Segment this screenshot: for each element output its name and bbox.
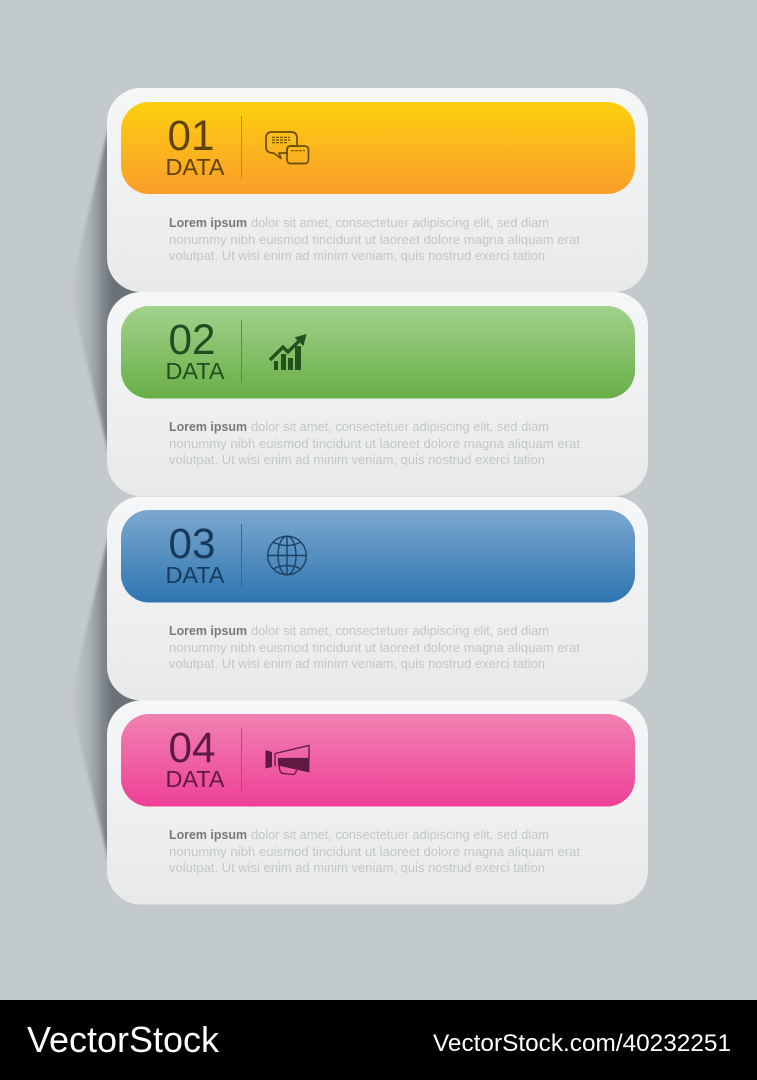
footer bar xyxy=(0,1000,757,1080)
icon: globe xyxy=(268,536,306,575)
header band 03 xyxy=(121,510,635,602)
card background 02 xyxy=(107,292,648,496)
description 04: volutpat. Ut wisi enim ad minim veniam, quis nostrud exerci tation xyxy=(169,861,545,875)
description 01: volutpat. Ut wisi enim ad minim veniam, quis nostrud exerci tation xyxy=(169,249,545,263)
header band 04 xyxy=(121,714,635,806)
description 03 xyxy=(169,624,581,671)
description 02: Lorem ipsum xyxy=(169,420,247,434)
description 02 xyxy=(169,420,581,467)
description 01: Lorem ipsum xyxy=(169,216,247,230)
description 03: volutpat. Ut wisi enim ad minim veniam, quis nostrud exerci tation xyxy=(169,657,545,671)
icon: chat bubbles xyxy=(266,132,308,164)
panel: step 02 xyxy=(107,292,648,496)
description 03: nonummy nibh euismod tincidunt ut laoreet dolore magna aliquam erat xyxy=(169,641,581,655)
footer image id: VectorStock.com/40232251 xyxy=(433,1030,731,1057)
divider 03 xyxy=(241,524,242,587)
label DATA 04: DATA xyxy=(166,766,225,792)
card background 01 xyxy=(107,88,648,292)
label DATA 03: DATA xyxy=(166,562,225,588)
description 04: dolor sit amet, consectetuer adipiscing elit, sed diam xyxy=(251,828,549,842)
divider 04 xyxy=(241,728,242,791)
label DATA 02: DATA xyxy=(166,358,225,384)
divider 02 xyxy=(241,320,242,383)
shadow: lower pair of cards xyxy=(70,538,145,858)
panel: step 01 xyxy=(107,88,648,292)
header band 01 xyxy=(121,102,635,194)
number 03: 03 xyxy=(168,520,216,568)
description 04: Lorem ipsum xyxy=(169,828,247,842)
description 01: dolor sit amet, consectetuer adipiscing elit, sed diam xyxy=(251,216,549,230)
card background 04 xyxy=(107,700,648,904)
header band 02 xyxy=(121,306,635,398)
footer logo text: VectorStock xyxy=(27,1019,220,1060)
description 01: nonummy nibh euismod tincidunt ut laoreet dolore magna aliquam erat xyxy=(169,233,581,247)
icon: rising chart xyxy=(270,334,306,370)
divider 01 xyxy=(241,116,242,179)
description 02: volutpat. Ut wisi enim ad minim veniam, quis nostrud exerci tation xyxy=(169,453,545,467)
label DATA 01: DATA xyxy=(166,154,225,180)
description 03: dolor sit amet, consectetuer adipiscing elit, sed diam xyxy=(251,624,549,638)
panel: step 04 xyxy=(107,700,648,904)
panel: step 03 xyxy=(107,496,648,700)
icon: megaphone xyxy=(266,746,310,774)
description 02: dolor sit amet, consectetuer adipiscing elit, sed diam xyxy=(251,420,549,434)
number 01: 01 xyxy=(168,112,214,160)
description 04 xyxy=(169,828,581,875)
number 04: 04 xyxy=(168,724,216,772)
description 02: nonummy nibh euismod tincidunt ut laoreet dolore magna aliquam erat xyxy=(169,437,581,451)
description 04: nonummy nibh euismod tincidunt ut laoreet dolore magna aliquam erat xyxy=(169,845,581,859)
shadow: upper pair of cards xyxy=(70,130,145,450)
number 02: 02 xyxy=(168,316,216,364)
description 01 xyxy=(169,216,581,263)
description 03: Lorem ipsum xyxy=(169,624,247,638)
card background 03 xyxy=(107,496,648,700)
